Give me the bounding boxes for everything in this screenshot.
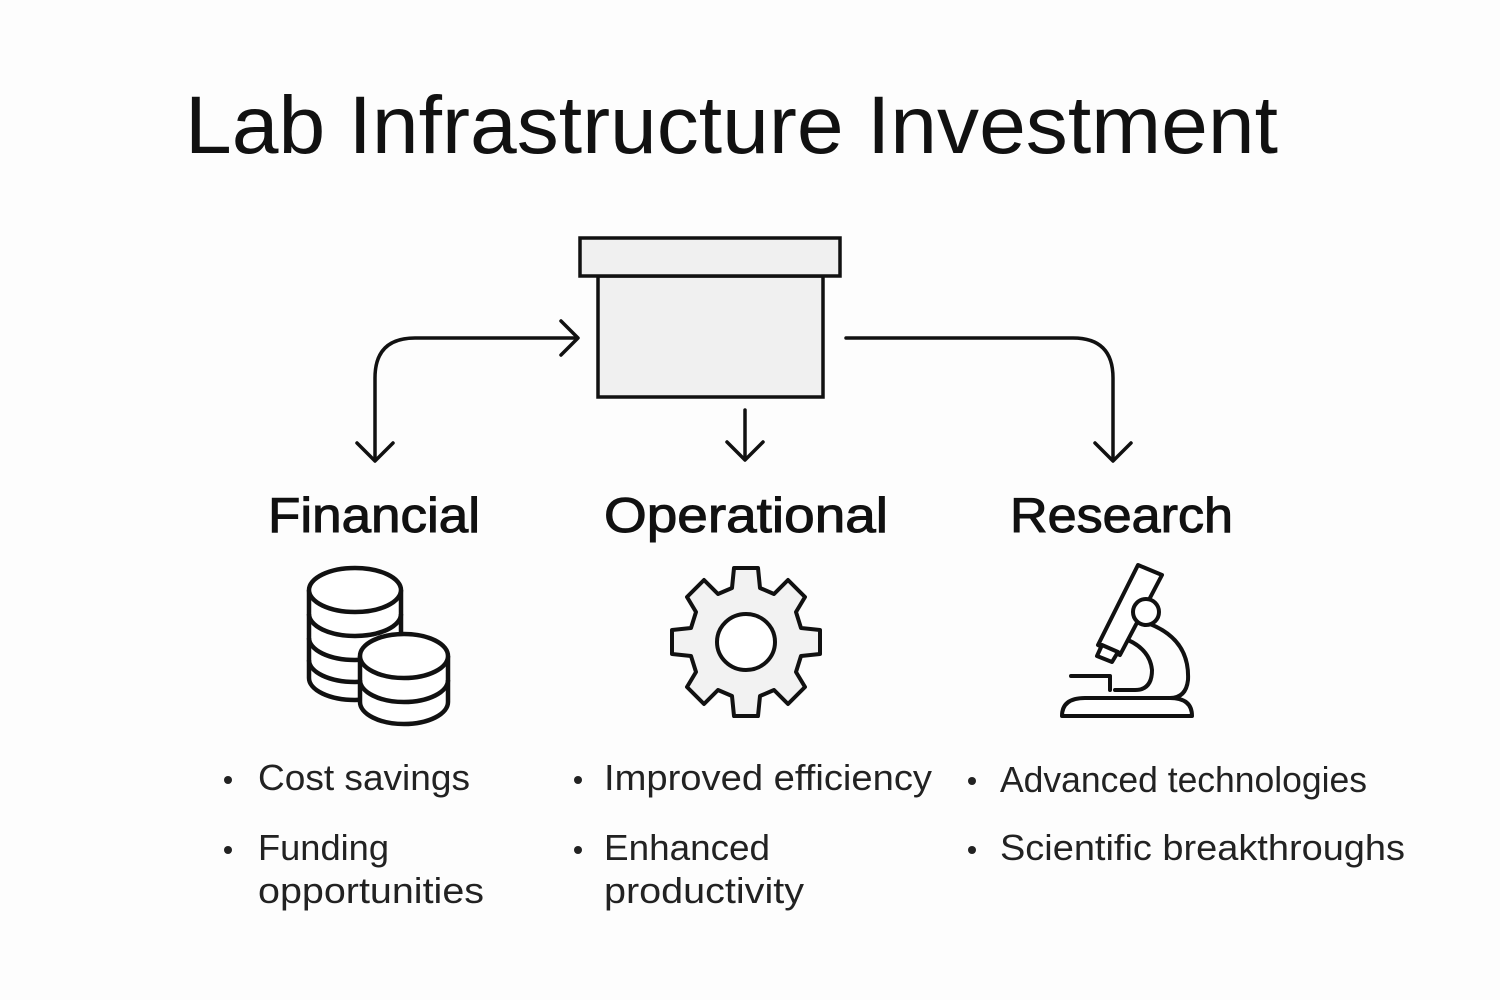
bullets: research: [968, 759, 1405, 868]
bullets: research: Scientific breakthroughs: [1000, 827, 1405, 868]
central box icon: [580, 238, 840, 397]
icon: coins: [309, 568, 448, 724]
heading: Financial: Financial: [268, 489, 480, 543]
heading: Research: Research: [1010, 489, 1233, 543]
arrow: right to research: [846, 338, 1131, 461]
bullets: operational: Enhanced: [604, 827, 770, 868]
arrow: down to operational: [727, 410, 763, 460]
title: Lab Infrastructure Investment: [185, 80, 1278, 171]
heading: Operational: Operational: [604, 489, 888, 543]
arrow: left to financial: [357, 321, 578, 461]
bullets: financial: [224, 757, 484, 911]
bullets: research: Advanced technologies: [1000, 759, 1367, 800]
icon: microscope: [1062, 565, 1192, 716]
icon: gear: [672, 568, 820, 716]
bullets: financial: Funding: [258, 827, 389, 868]
bullets: operational: [574, 757, 932, 911]
bullets: operational: productivity: [604, 870, 804, 911]
bullets: financial: Cost savings: [258, 757, 470, 798]
bullets: operational: Improved efficiency: [604, 757, 932, 798]
bullets: financial: opportunities: [258, 870, 484, 911]
